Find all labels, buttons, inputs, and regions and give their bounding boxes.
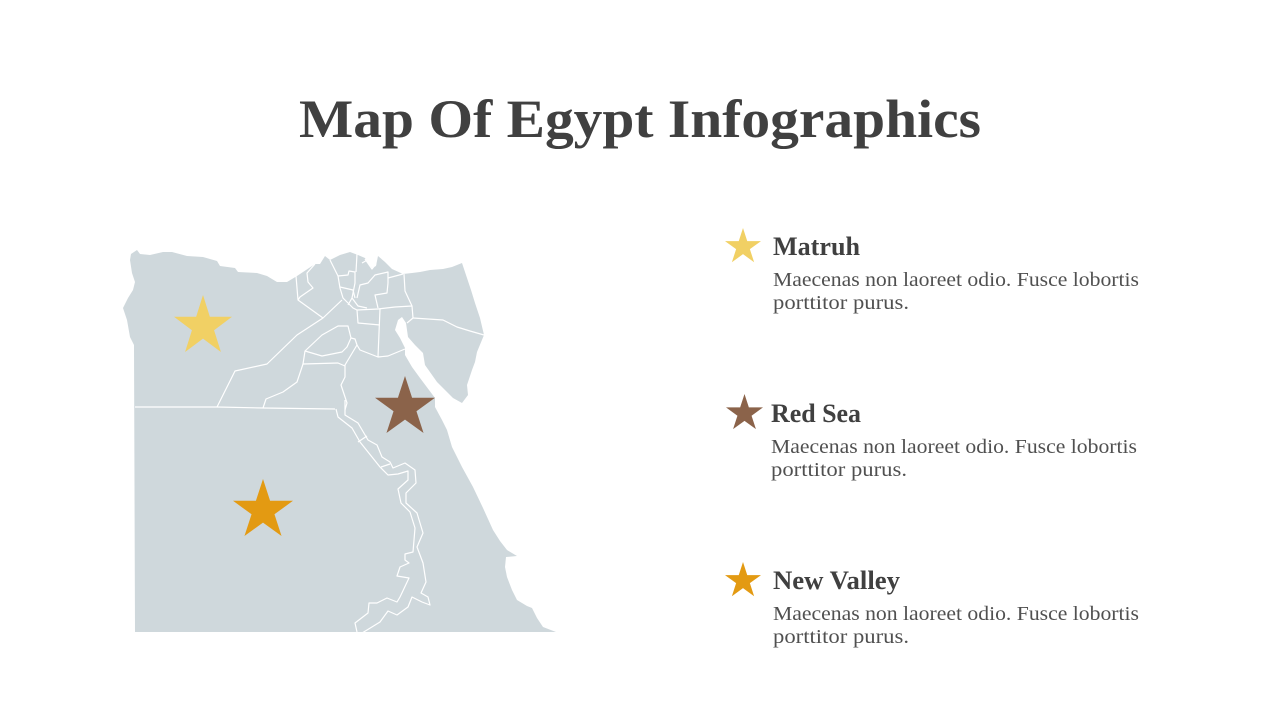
- Nile valley east line: [345, 400, 430, 633]
- heading: Red Sea: Red Sea: [771, 399, 861, 428]
- legend item: New Valley: [725, 562, 1139, 648]
- star: Red Sea on map: [375, 376, 435, 433]
- governorate borders: [135, 254, 484, 633]
- Nile valley west line: [336, 409, 415, 632]
- title: Map Of Egypt Infographics: [299, 89, 981, 149]
- legend item: Matruh: [725, 228, 1139, 314]
- heading: Matruh: Matruh: [773, 232, 861, 261]
- star: New Valley on map: [233, 479, 293, 536]
- icon: brown star: [726, 394, 763, 429]
- description: Matruh: Maecenas non laoreet odio. Fusce lobortis: [773, 269, 1139, 291]
- icon: orange star: [725, 562, 761, 596]
- description: Red Sea: Maecenas non laoreet odio. Fusce lobortis: [771, 436, 1137, 458]
- description: New Valley: porttitor purus.: [773, 626, 909, 648]
- map of Egypt: [123, 250, 556, 633]
- legend item: Red Sea: [726, 394, 1137, 481]
- description: Matruh: porttitor purus.: [773, 292, 909, 314]
- heading: New Valley: New Valley: [773, 566, 900, 595]
- map land shape: [123, 250, 556, 632]
- description: New Valley: Maecenas non laoreet odio. Fusce lobortis: [773, 603, 1139, 625]
- description: Red Sea: porttitor purus.: [771, 459, 907, 481]
- star: Matruh on map: [174, 295, 232, 352]
- icon: yellow star: [725, 228, 761, 262]
